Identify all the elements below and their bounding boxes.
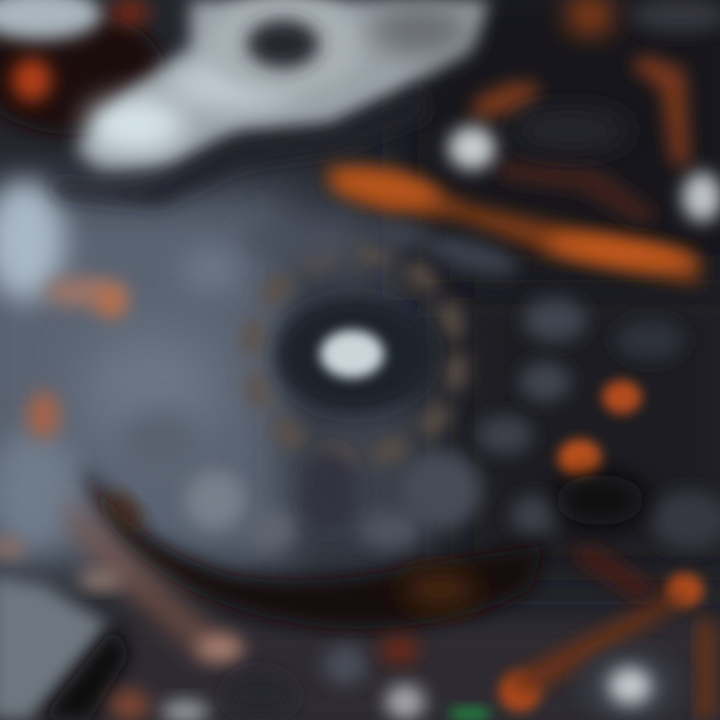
metallic gear: light silver bbox=[50, 0, 490, 205]
central gear: ring and hub bbox=[252, 252, 458, 458]
top-left corner: dark red machinery bbox=[0, 0, 165, 134]
left side: small copper accents bbox=[28, 277, 128, 439]
dark arc: rim shadow bbox=[85, 465, 545, 629]
cog teeth: dark mid-right blocks bbox=[120, 218, 720, 550]
orange streaks and top-right pipes bbox=[325, 0, 720, 285]
bottom row: bolts and green accent bbox=[110, 634, 682, 720]
gear shadow bbox=[50, 90, 430, 205]
orange nodes on the right bbox=[499, 380, 714, 720]
bottom-left: gray slab with dark gap bbox=[0, 500, 225, 720]
